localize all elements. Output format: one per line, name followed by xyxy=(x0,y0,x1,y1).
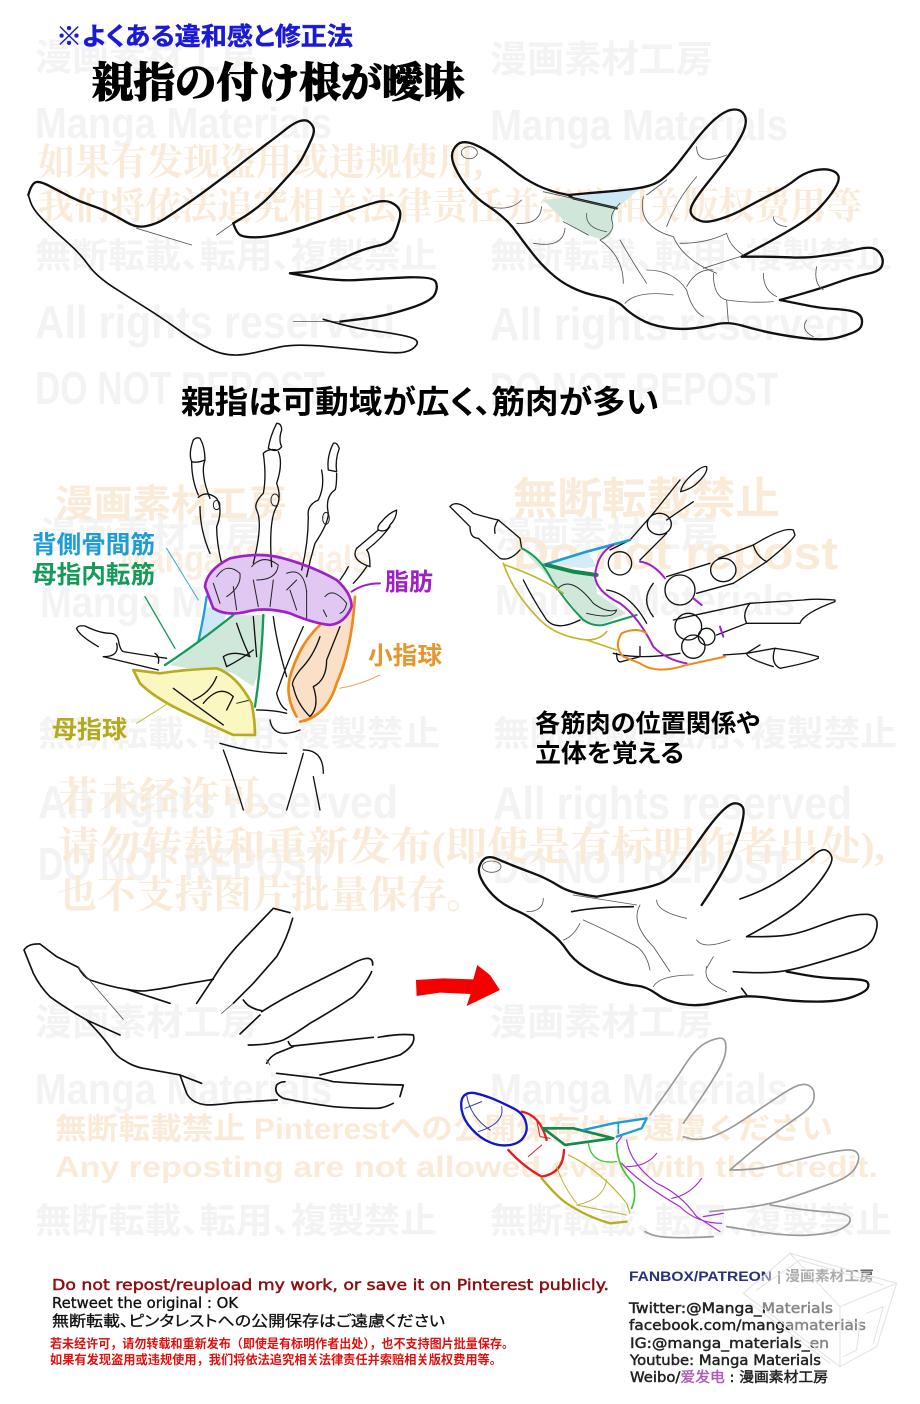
watermarks: 若未经许可, xyxy=(58,774,270,819)
bones xyxy=(77,423,397,810)
watermarks: 请勿转载和重新发布(即使是有标明作者出处), xyxy=(58,824,885,869)
outline: hypothenar right xyxy=(300,597,355,722)
watermarks: 我们将依法追究相关法律责任并索赔相关版权费用等 xyxy=(38,186,862,228)
outline: fat pad mark 1 xyxy=(640,562,665,578)
muscle: adductor fill xyxy=(170,615,263,687)
label: fat: 脂肪 xyxy=(385,569,433,596)
yellow thenar xyxy=(542,1155,630,1223)
outline: interosseous xyxy=(198,597,207,642)
outline: thenar upper xyxy=(505,565,563,593)
watermarks: 漫画素材工房 xyxy=(40,515,262,556)
fanbox patreon: FANBOX/PATREON xyxy=(629,1268,772,1284)
watermarks: 無断転載、転用、複製禁止 xyxy=(490,237,892,276)
bright green muscle xyxy=(588,1143,635,1208)
hand: colored structure overlay xyxy=(461,1038,859,1238)
hand: bad example xyxy=(28,120,437,355)
heading: thumb range and muscles: 親指は可動域が広く、筋肉が多い xyxy=(181,384,659,420)
watermarks: 漫画素材工房 xyxy=(490,39,713,80)
blue thumb tip xyxy=(461,1093,527,1145)
twitter: Twitter:@Manga_Materials xyxy=(628,1301,833,1317)
red thumb joint xyxy=(508,1112,564,1177)
watermarks: All rights reserved xyxy=(490,298,850,350)
muscle: thenar fill xyxy=(133,668,255,735)
watermarks: 漫画素材工房 xyxy=(55,484,287,526)
title: 親指の付け根が曖昧 xyxy=(92,60,465,106)
outline: thenar xyxy=(503,563,607,640)
skeleton diagram with muscle groups xyxy=(77,423,397,810)
english warning: Do not repost/reupload my work, or save it on Pinterest publicly. xyxy=(52,1276,609,1294)
outline: adductor head xyxy=(547,565,597,575)
watermarks: 無断転載、転用、複製禁止 xyxy=(35,1202,437,1241)
notice: repost warning xyxy=(50,1276,609,1367)
watermarks: 無断転載、転用、複製禁止 xyxy=(493,715,897,754)
subtitle: ※よくある違和感と修正法 xyxy=(56,23,353,51)
leader: interosseous xyxy=(167,548,198,600)
watermarks: 也不支持图片批量保存。 xyxy=(58,874,485,917)
leader: fat xyxy=(352,583,380,592)
watermarks: Any reposting are not allowed even with the credit. xyxy=(55,1151,878,1184)
watermarks: 無断転載、転用、複製禁止 xyxy=(490,1202,892,1241)
chinese warning line 1: 若未经许可，请勿转载和重新发布（即使是有标明作者出处），也不支持图片批量保存。 xyxy=(50,1336,514,1351)
retweet note: Retweet the original : OK xyxy=(52,1294,239,1312)
watermarks: 無断転載禁止 Pinterestへの公開保存はご遠慮ください xyxy=(55,1112,833,1146)
hand: corrected drawing xyxy=(479,803,877,1005)
japanese warning: 無断転載、ピンタレストへの公開保存はご遠慮ください xyxy=(52,1313,445,1330)
watermarks: DO NOT REPOST xyxy=(490,363,778,415)
watermarks: Manga Materials xyxy=(35,1065,332,1114)
stamp watermark xyxy=(743,1253,897,1367)
outline: thenar xyxy=(133,668,255,735)
watermarks: Manga Materials xyxy=(120,539,370,581)
gray finger outlines xyxy=(645,1038,859,1238)
watermarks: All rights reserved xyxy=(35,296,395,348)
outline: fat pad mark 2 xyxy=(693,598,702,605)
label: dorsal interosseous: 背側骨間筋 xyxy=(32,531,155,559)
leader: hypothenar xyxy=(340,675,380,688)
facebook: facebook.com/mangamaterials xyxy=(629,1318,866,1334)
hand: annotated reference with shaded thumb web xyxy=(452,110,883,339)
bones xyxy=(450,466,835,668)
weibo: Weibo/爱发电 : 漫画素材工房 xyxy=(630,1370,828,1386)
caption: muscle positions: 各筋肉の位置関係や xyxy=(535,710,760,738)
outline: adductor xyxy=(522,548,637,625)
outline: adductor xyxy=(165,615,233,665)
watermarks: 如果有发现盗用或违规使用, xyxy=(38,142,483,184)
watermarks: DO NOT REPOST xyxy=(493,841,790,893)
outline: hypothenar xyxy=(618,630,725,670)
shading: interosseous xyxy=(573,188,640,208)
label: thenar: 母指球 xyxy=(52,716,127,744)
watermarks: 無断転載、転用、複製禁止 xyxy=(35,237,437,276)
muscle: hypothenar fill xyxy=(288,598,353,723)
outline: thenar end xyxy=(587,640,617,650)
watermarks: 無断転載禁止 xyxy=(513,475,780,524)
muscle: interosseous fill xyxy=(200,607,227,640)
watermarks: Do not repost xyxy=(513,527,838,579)
outline: hypothenar xyxy=(288,625,320,717)
arrow: red xyxy=(416,965,500,1006)
skeleton perspective diagram xyxy=(450,466,835,670)
watermarks: Manga Materials xyxy=(490,1065,788,1114)
watermarks: Manga Materials xyxy=(35,99,332,148)
outline: fat pad xyxy=(595,545,687,663)
shading: adductor xyxy=(543,197,615,240)
outline: interosseous xyxy=(543,540,630,565)
youtube: Youtube: Manga Materials xyxy=(629,1353,821,1369)
instagram: IG:@manga_materials_en xyxy=(630,1336,829,1352)
outline: fat pad xyxy=(205,555,352,625)
watermarks: 漫画素材工房 xyxy=(35,37,257,78)
watermarks: DO NOT REPOST xyxy=(38,838,328,890)
outline: adductor right xyxy=(255,615,263,707)
caption: muscle positions: 立体を覚える xyxy=(535,740,684,768)
watermarks: Manga Materials xyxy=(40,578,337,627)
watermarks: All rights reserved xyxy=(493,777,852,829)
purple fat pad xyxy=(617,1137,723,1232)
watermarks: All rights reserved xyxy=(38,776,398,828)
watermarks: 無断転載、転用、複製禁止 xyxy=(38,715,440,754)
muscle: fat pad fill xyxy=(205,555,352,625)
watermarks: Manga Materials xyxy=(490,101,788,150)
label: adductor pollicis: 母指内転筋 xyxy=(32,561,155,589)
chinese warning line 2: 如果有发现盗用或违规使用，我们将依法追究相关法律责任并索赔相关版权费用等。 xyxy=(50,1352,502,1367)
watermarks: 漫画素材工房 xyxy=(490,1002,713,1043)
outline: fat pad mark 3 xyxy=(720,627,723,637)
muscle fills xyxy=(523,550,627,625)
watermarks: DO NOT REPOST xyxy=(35,362,325,414)
watermarks: Manga Materials xyxy=(495,576,795,625)
label: hypothenar: 小指球 xyxy=(368,642,442,670)
leader: thenar xyxy=(137,703,168,723)
studio name: | 漫画素材工房 xyxy=(777,1268,874,1284)
watermarks: 漫画素材工房 xyxy=(495,515,718,556)
light blue interosseous xyxy=(583,1118,647,1137)
caption: muscle positions xyxy=(535,710,760,768)
watermarks: 漫画素材工房 xyxy=(35,1002,258,1043)
leader: adductor xyxy=(145,597,175,648)
credits xyxy=(628,1268,874,1386)
green adductor ring xyxy=(543,1128,613,1145)
hand: line draft xyxy=(24,908,414,1108)
